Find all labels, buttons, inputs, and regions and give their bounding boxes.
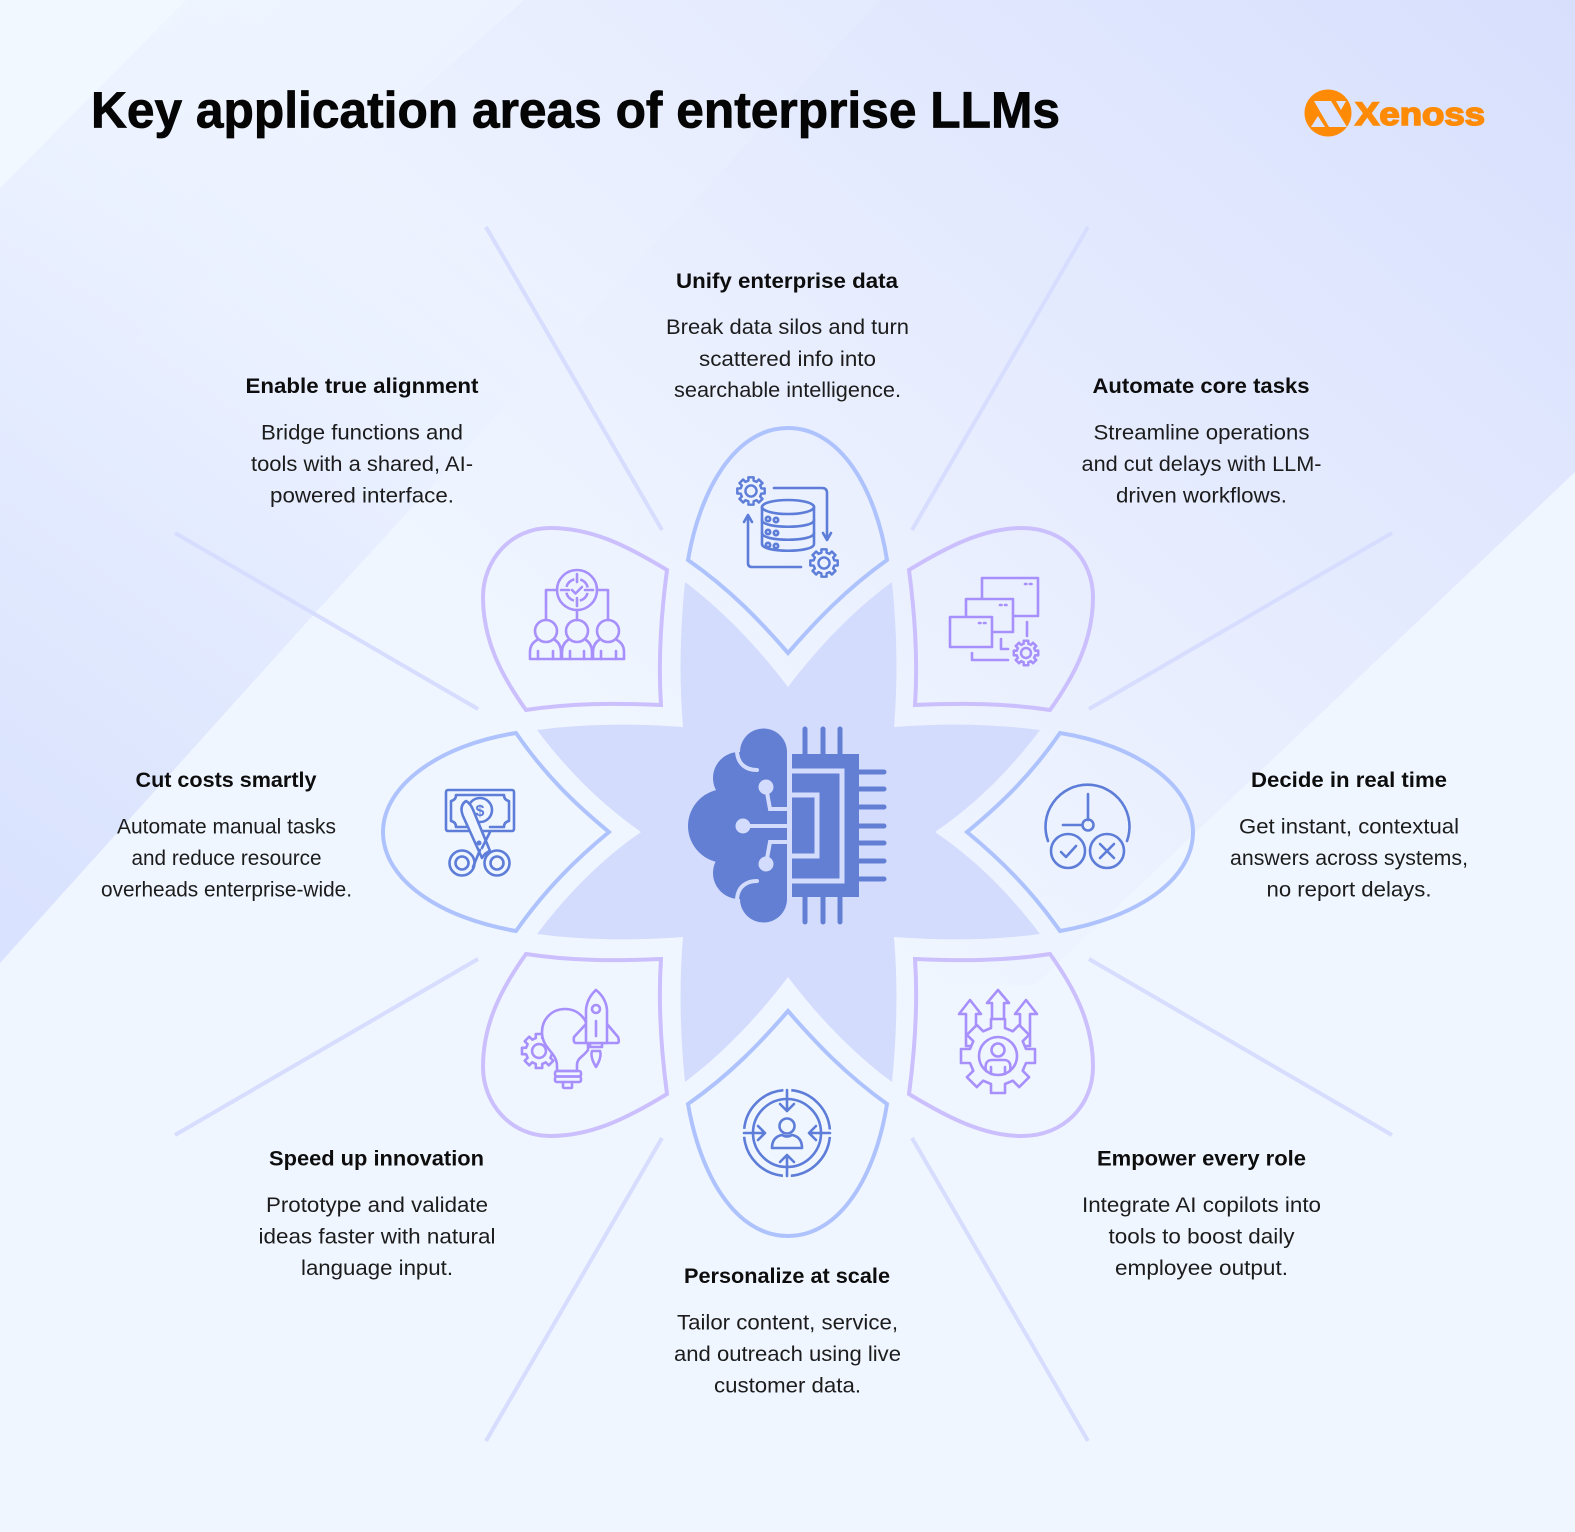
- logo: Xenoss: Xenoss: [1355, 96, 1485, 132]
- petal: automate core tasks: [909, 528, 1093, 710]
- icon: windows with gear: [950, 578, 1038, 665]
- description: and reduce resource: [132, 846, 322, 870]
- petal: cut costs smartly: [383, 733, 609, 931]
- description: [1082, 1193, 1321, 1280]
- petal: enable true alignment: [483, 528, 667, 710]
- icon: clock with check and cross: [1046, 785, 1129, 868]
- description: [101, 814, 352, 902]
- description: employee output.: [1115, 1256, 1288, 1280]
- text: unify enterprise data: [666, 269, 909, 402]
- icon: scissors cutting money: [446, 790, 514, 876]
- petal: personalize at scale: [688, 1011, 887, 1236]
- description: answers across systems,: [1230, 846, 1468, 870]
- description: customer data.: [714, 1374, 861, 1398]
- text: personalize at scale: [674, 1264, 901, 1398]
- heading: Empower every role: [1097, 1146, 1306, 1170]
- description: and outreach using live: [674, 1342, 901, 1366]
- icon: bulb, gear and rocket: [522, 990, 619, 1088]
- description: language input.: [301, 1256, 453, 1280]
- heading: Cut costs smartly: [136, 768, 317, 792]
- radiating rays: [175, 227, 1392, 1441]
- description: tools with a shared, AI-: [251, 452, 473, 476]
- description: Integrate AI copilots into: [1082, 1193, 1321, 1217]
- heading: Unify enterprise data: [676, 269, 899, 293]
- petal: empower every role: [909, 954, 1093, 1136]
- description: no report delays.: [1266, 878, 1432, 902]
- description: scattered info into: [699, 347, 876, 371]
- title: Key application areas of enterprise LLMs: [91, 82, 1060, 138]
- text: decide in real time: [1230, 768, 1468, 902]
- heading: Speed up innovation: [269, 1146, 484, 1170]
- icon: brain and chip: [688, 728, 884, 922]
- description: overheads enterprise-wide.: [101, 878, 352, 902]
- description: Get instant, contextual: [1239, 814, 1459, 838]
- icon: team with target: [530, 570, 624, 659]
- text: empower every role: [1082, 1146, 1321, 1280]
- central star shape: [537, 582, 1040, 1082]
- description: Bridge functions and: [261, 420, 463, 444]
- heading: Automate core tasks: [1092, 374, 1310, 398]
- text: speed up innovation: [258, 1146, 496, 1280]
- description: [251, 420, 473, 508]
- heading: Decide in real time: [1251, 768, 1447, 792]
- description: driven workflows.: [1116, 484, 1287, 508]
- description: and cut delays with LLM-: [1082, 452, 1322, 476]
- logo: Xenoss: [1304, 90, 1485, 136]
- description: tools to boost daily: [1108, 1224, 1295, 1248]
- description: [258, 1193, 496, 1280]
- petal: unify enterprise data: [688, 428, 887, 653]
- heading: Enable true alignment: [246, 374, 478, 398]
- text: automate core tasks: [1082, 374, 1322, 508]
- description: Automate manual tasks: [117, 814, 336, 838]
- description: Tailor content, service,: [677, 1310, 898, 1334]
- icon: database with gears: [737, 477, 838, 577]
- text: enable true alignment: [246, 374, 478, 508]
- description: [674, 1310, 901, 1398]
- text: cut costs smartly: [101, 768, 352, 902]
- description: Streamline operations: [1094, 420, 1310, 444]
- description: [1082, 420, 1322, 508]
- description: Prototype and validate: [266, 1193, 488, 1217]
- icon: scissors cutting money: $: [476, 803, 485, 820]
- description: searchable intelligence.: [674, 378, 901, 402]
- icon: gear with person and arrows: [959, 990, 1037, 1093]
- petal: decide in real time: [967, 733, 1193, 931]
- heading: Personalize at scale: [684, 1264, 890, 1288]
- icon: customer target: [744, 1090, 830, 1176]
- description: ideas faster with natural: [258, 1224, 496, 1248]
- petal: speed up innovation: [483, 954, 667, 1136]
- description: [1230, 814, 1468, 902]
- description: [666, 315, 909, 402]
- description: powered interface.: [270, 484, 454, 508]
- description: Break data silos and turn: [666, 315, 909, 339]
